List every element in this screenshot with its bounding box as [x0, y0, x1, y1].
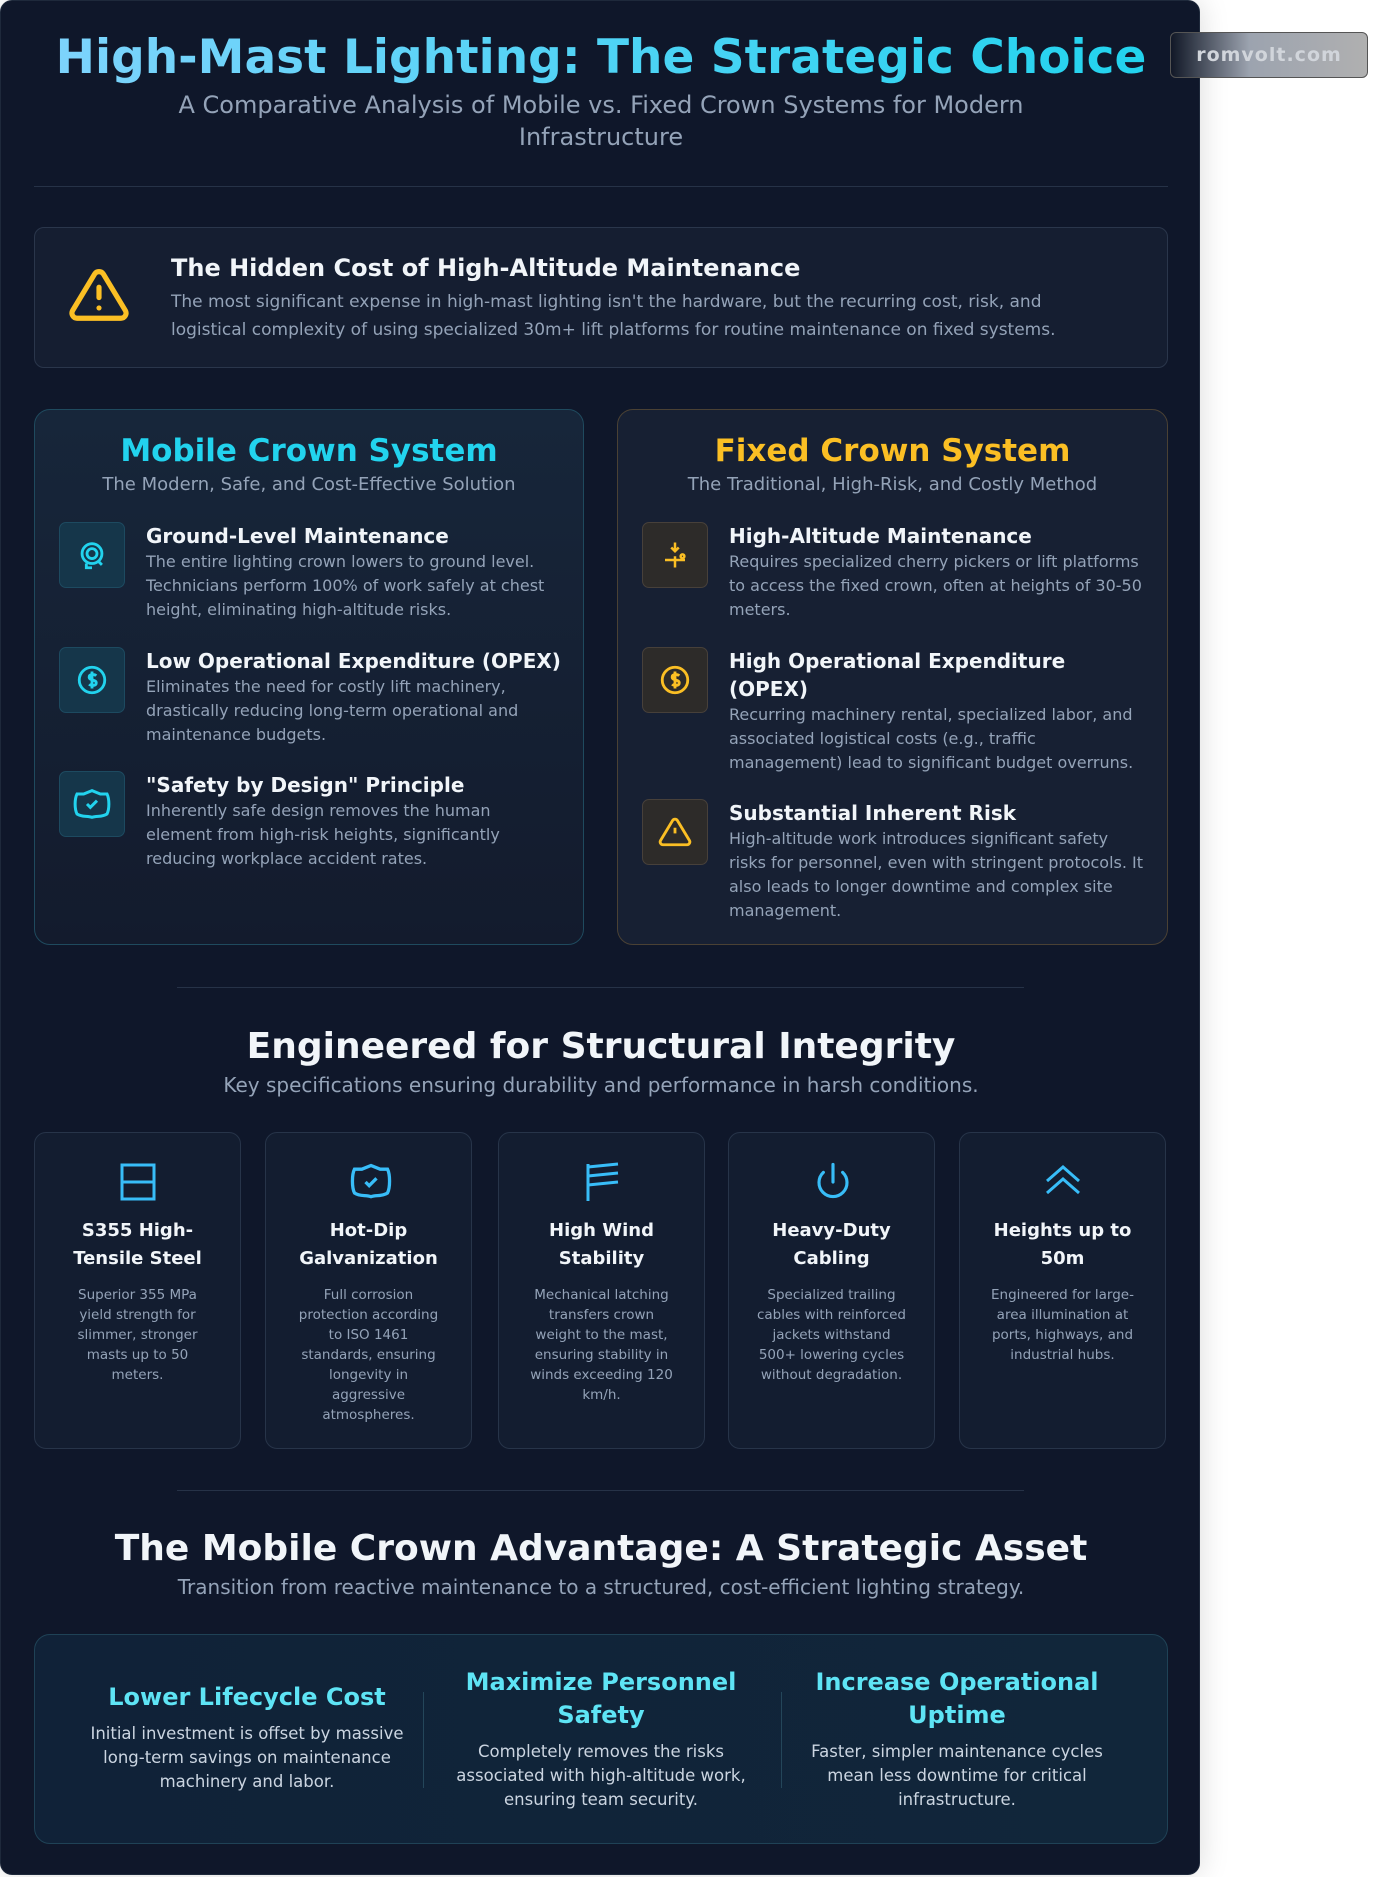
panel: advantages [34, 1634, 1168, 1844]
subtitle: A Comparative Analysis of Mobile vs. Fixed Crown Systems for Modern Infrastructure [178, 91, 1024, 151]
panel: mobile crown: Low Operational Expenditure (OPEX) [146, 649, 561, 673]
spec: steel: S355 High-Tensile Steel [73, 1220, 202, 1269]
column: personnel safety: Completely removes the risks associated with high-altitude work, ensuring team security. [456, 1742, 746, 1809]
panel: mobile crown: Ground-Level Maintenance [146, 524, 449, 548]
column: uptime: Faster, simpler maintenance cycles mean less downtime for critical infrastructure. [811, 1742, 1103, 1809]
heading: structural integrity [223, 1026, 979, 1097]
alert box: hidden cost [34, 227, 1168, 368]
heading: structural integrity: Engineered for Structural Integrity [247, 1026, 955, 1067]
spec: wind: Mechanical latching transfers crown weight to the mast, ensuring stability in winds exceeding 120 km/h. [530, 1287, 673, 1403]
spec: cabling: Heavy-Duty Cabling [772, 1220, 891, 1269]
column: uptime [811, 1668, 1103, 1809]
heading: mobile crown advantage: The Mobile Crown Advantage: A Strategic Asset [115, 1528, 1087, 1569]
panel: fixed crown: High-altitude work introduces significant safety risks for personnel, even with stringent protocols. It also leads to longer downtime and complex site management. [729, 829, 1143, 920]
badge: romvolt.com: romvolt.com [1196, 44, 1342, 66]
panel: mobile crown: "Safety by Design" Principle [146, 773, 464, 797]
alert text: The most significant expense in high-mast lighting isn't the hardware, but the recurring cost, risk, and logistical complexity of using specialized 30m+ lift platforms for routine maintenance on fixed systems. [171, 292, 1056, 340]
badge: romvolt.com [1170, 32, 1368, 78]
spec: heights [959, 1132, 1166, 1449]
column: lifecycle cost: Lower Lifecycle Cost [108, 1683, 386, 1711]
spec: wind: High Wind Stability [549, 1220, 654, 1269]
panel: fixed crown: Recurring machinery rental, specialized labor, and associated logistical costs (e.g., traffic management) lead to significant budget overruns. [729, 705, 1133, 772]
panel heading: Mobile Crown System [120, 433, 498, 469]
title: High-Mast Lighting: The Strategic Choice [56, 30, 1146, 85]
item: low opex [59, 647, 561, 744]
panel: fixed crown: High-Altitude Maintenance [729, 524, 1032, 548]
column: personnel safety: Maximize Personnel Safety [466, 1668, 736, 1729]
panel: mobile crown: Eliminates the need for costly lift machinery, drastically reducing long-term operational and maintenance budgets. [146, 677, 518, 744]
panel heading [688, 433, 1097, 495]
panel: mobile crown [34, 409, 584, 945]
item: inherent risk [642, 799, 1143, 920]
spec: galvanization: Full corrosion protection according to ISO 1461 standards, ensuring longevity in aggressive atmospheres. [299, 1287, 438, 1423]
spec: cabling [728, 1132, 935, 1449]
column: personnel safety [456, 1668, 746, 1809]
spec: wind [498, 1132, 705, 1449]
icon: warning [69, 269, 129, 321]
item: safety by design [59, 771, 500, 868]
column: uptime: Increase Operational Uptime [815, 1668, 1099, 1729]
panel heading [102, 433, 516, 495]
heading: mobile crown advantage: Transition from reactive maintenance to a structured, cost-efficient lighting strategy. [178, 1575, 1024, 1599]
spec: galvanization: Hot-Dip Galvanization [299, 1220, 438, 1269]
panel: mobile crown: Inherently safe design removes the human element from high-risk heights, significantly reducing workplace accident rates. [146, 801, 500, 868]
panel: fixed crown: Requires specialized cherry pickers or lift platforms to access the fixed crown, often at heights of 30-50 meters. [729, 552, 1142, 619]
spec: cabling: Specialized trailing cables with reinforced jackets withstand 500+ lowering cycles without degradation. [757, 1287, 906, 1383]
heading: structural integrity: Key specifications ensuring durability and performance in harsh conditions. [223, 1073, 979, 1097]
panel: fixed crown: High Operational Expenditure (OPEX) [729, 649, 1065, 701]
panel heading: The Modern, Safe, and Cost-Effective Solution [102, 474, 516, 495]
alert text: The Hidden Cost of High-Altitude Maintenance [171, 254, 800, 282]
item: ground-level [59, 522, 544, 619]
panel: mobile crown: The entire lighting crown lowers to ground level. Technicians perform 100% of work safely at chest height, eliminating high-altitude risks. [146, 552, 544, 619]
column: lifecycle cost [90, 1683, 404, 1791]
spec: heights: Engineered for large-area illumination at ports, highways, and industrial hubs. [991, 1287, 1134, 1363]
column: lifecycle cost: Initial investment is offset by massive long-term savings on maintenance machinery and labor. [90, 1724, 404, 1791]
item: high opex [642, 647, 1133, 772]
spec: steel [34, 1132, 241, 1449]
panel heading: The Traditional, High-Risk, and Costly Method [688, 474, 1097, 495]
spec: steel: Superior 355 MPa yield strength for slimmer, stronger masts up to 50 meters. [77, 1287, 198, 1383]
spec: heights: Heights up to 50m [994, 1220, 1131, 1269]
item: high altitude [642, 522, 1142, 619]
panel heading: Fixed Crown System [715, 433, 1070, 469]
heading: mobile crown advantage [114, 1528, 1087, 1599]
spec: galvanization [265, 1132, 472, 1449]
alert text [170, 254, 1056, 340]
panel: fixed crown: Substantial Inherent Risk [729, 801, 1016, 825]
panel: fixed crown [617, 409, 1168, 945]
